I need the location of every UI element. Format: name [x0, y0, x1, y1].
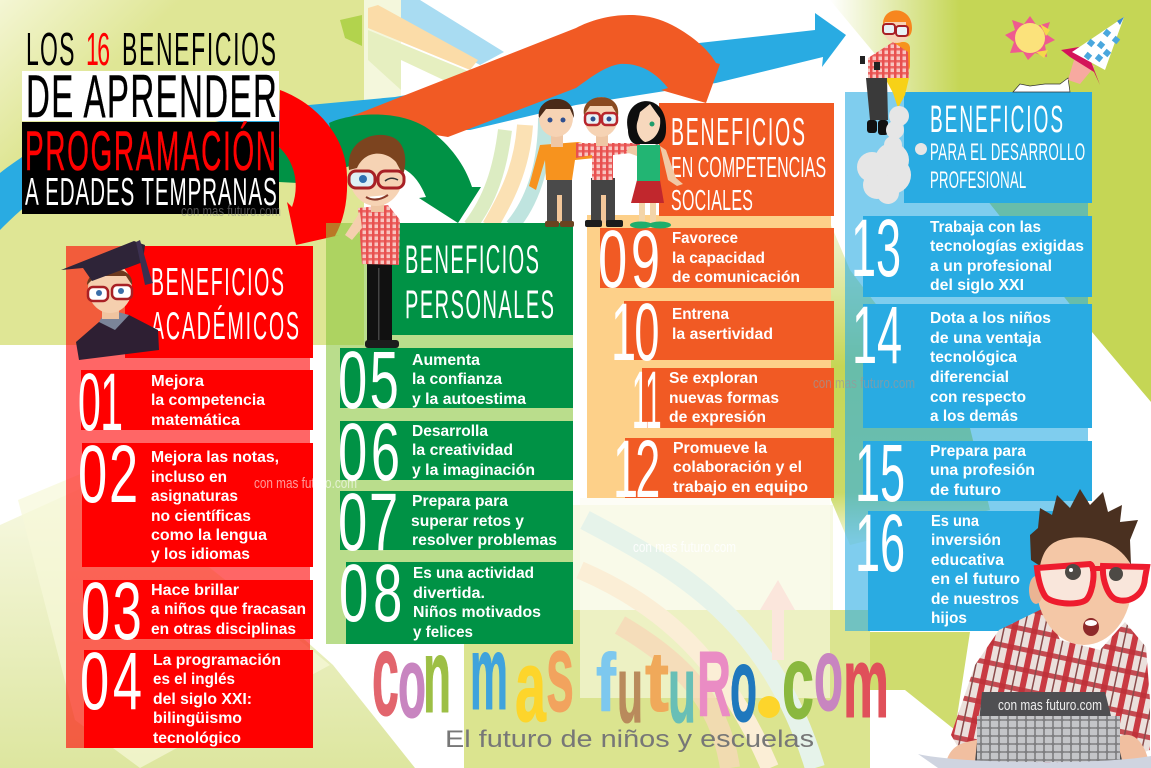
- item 03: 03: [81, 565, 142, 657]
- item 16: [855, 498, 1068, 631]
- icon: big boy with red glasses and keyboard: [918, 489, 1151, 768]
- item 13: del siglo XXI: [930, 277, 1024, 294]
- item 06: 06: [338, 406, 400, 498]
- background: top pastel ribbons: [340, 0, 545, 226]
- item 14: de una ventaja: [930, 330, 1041, 347]
- item 07: 07: [338, 476, 398, 568]
- logo: con mas futuro.com: [372, 609, 889, 744]
- item 03: en otras disciplinas: [151, 621, 296, 638]
- item 16: en el futuro: [931, 571, 1020, 588]
- item 04: es el inglés: [153, 671, 235, 688]
- item 10: Entrena: [672, 306, 729, 323]
- panel: académicos: [66, 246, 313, 748]
- item 05: y la autoestima: [412, 391, 526, 408]
- logo: con mas futuro.com: t: [645, 635, 669, 729]
- tagline: El futuro de niños y escuelas: [445, 726, 814, 753]
- heading: beneficios para el desarrollo profesional: [904, 92, 1092, 203]
- logo: con mas futuro.com: n: [423, 618, 451, 735]
- item 10: 10: [611, 287, 659, 379]
- heading: beneficios personales: BENEFICIOS: [405, 236, 539, 282]
- item 11: nuevas formas: [669, 390, 779, 407]
- watermarks: [254, 375, 915, 556]
- item 16: 16: [855, 498, 905, 590]
- item 04: La programación: [153, 652, 281, 669]
- background: lower-left pale area: [0, 470, 415, 768]
- item 15: 15: [855, 428, 905, 520]
- background: green strip behind blue panel: [831, 225, 990, 545]
- icon: three children: [529, 97, 683, 228]
- item 07: [338, 476, 573, 568]
- logo: con mas futuro.com: a: [515, 629, 547, 743]
- title: PROGRAMACIÓN: [25, 121, 276, 183]
- item 11: de expresión: [669, 409, 766, 426]
- item 06: la creatividad: [412, 442, 513, 459]
- item 02: y los idiomas: [151, 546, 250, 563]
- item 07: Prepara para: [412, 493, 508, 510]
- item 10: la asertividad: [672, 326, 773, 343]
- item 10: [611, 287, 834, 379]
- item 04: bilingüismo: [153, 710, 242, 727]
- title: A EDADES TEMPRANAS: [25, 170, 277, 214]
- item 15: [855, 428, 1092, 520]
- item 05: la confianza: [412, 371, 502, 388]
- heading: beneficios académicos: BENEFICIOS: [151, 260, 284, 304]
- background: lime triangle under blue panel: [848, 632, 970, 730]
- logo: con mas futuro.com: s: [546, 611, 574, 735]
- item 04: 04: [80, 635, 142, 727]
- item 12: 12: [613, 424, 660, 516]
- watermark: con mas futuro.com: [181, 203, 281, 220]
- item 09: 09: [598, 213, 660, 305]
- logo: con mas futuro.com: R: [697, 632, 731, 736]
- heading: beneficios académicos: [125, 246, 313, 358]
- title: 16: [86, 23, 110, 75]
- item 03: Hace brillar: [151, 582, 239, 599]
- heading: beneficios en competencias sociales: BENEFICIOS: [671, 110, 805, 154]
- item 13: 13: [851, 203, 901, 295]
- logo: con mas futuro.com: f: [596, 638, 617, 729]
- heading: beneficios personales: [388, 223, 573, 335]
- logo: con mas futuro.com: o: [398, 627, 426, 739]
- background: pale green top-left block: [0, 0, 364, 345]
- item 09: Favorece: [672, 230, 738, 247]
- background: lime green top-right area: [830, 0, 1151, 402]
- heading: beneficios en competencias sociales: [659, 103, 834, 216]
- item 05: [338, 334, 573, 426]
- background: lower-centre pastel area: [464, 498, 870, 768]
- title: BENEFICIOS: [122, 23, 276, 75]
- item 08: Es una actividad: [413, 565, 534, 582]
- watermarks: con mas futuro.com: [813, 375, 915, 392]
- icon: graduate character: [61, 240, 159, 360]
- item 02: [78, 428, 313, 567]
- item 09: la capacidad: [672, 250, 765, 267]
- item 02: Mejora las notas,: [151, 449, 279, 466]
- item 13: [851, 203, 1092, 297]
- item 02: asignaturas: [151, 488, 238, 505]
- arrow: green: [279, 114, 481, 223]
- icon: rocket: [1013, 17, 1124, 92]
- item 08: y felices: [413, 624, 473, 641]
- heading: beneficios personales: PERSONALES: [405, 281, 554, 327]
- logo: con mas futuro.com: m: [843, 627, 889, 739]
- heading: beneficios académicos: ACADÉMICOS: [151, 304, 299, 348]
- item 02: no científicas: [151, 508, 251, 525]
- watermarks: con mas futuro.com: [633, 539, 736, 556]
- item 14: 14: [852, 290, 902, 382]
- item 12: Promueve la: [673, 440, 767, 457]
- item 08: divertida.: [413, 585, 485, 602]
- item 11: 11: [632, 355, 662, 447]
- logo: con mas futuro.com: u: [668, 637, 696, 743]
- item 14: Dota a los niños: [930, 310, 1051, 327]
- item 03: a niños que fracasan: [151, 601, 306, 618]
- item 14: a los demás: [930, 408, 1018, 425]
- child: boy in orange: [529, 99, 595, 227]
- item 13: a un profesional: [930, 258, 1052, 275]
- item 12: trabajo en equipo: [673, 479, 808, 496]
- title: LOS: [26, 23, 74, 75]
- logo: con mas futuro.com: o: [814, 616, 843, 733]
- item 08: Niños motivados: [413, 604, 541, 621]
- icon: smoke cloud: [857, 106, 927, 204]
- arrow: blue: [0, 13, 846, 230]
- item 16: educativa: [931, 552, 1004, 569]
- child: boy with plaid shirt: [576, 97, 640, 227]
- item 05: Aumenta: [412, 352, 480, 369]
- child: girl: [626, 101, 683, 228]
- item 07: superar retos y: [411, 513, 524, 530]
- panel: desarrollo profesional: [845, 92, 1092, 631]
- item 15: Prepara para: [930, 443, 1026, 460]
- item 06: y la imaginación: [412, 462, 535, 479]
- item 02: como la lengua: [151, 527, 267, 544]
- logo: con mas futuro.com: c: [372, 609, 399, 741]
- item 13: tecnologías exigidas: [930, 238, 1084, 255]
- item 01: la competencia: [151, 392, 265, 409]
- title: [22, 23, 279, 214]
- icon: big boy with red glasses and keyboard: con mas futuro.com: [998, 697, 1102, 714]
- heading: beneficios en competencias sociales: SOCIALES: [671, 184, 753, 216]
- icon: sun: [1005, 16, 1055, 60]
- title: DE APRENDER: [26, 64, 277, 131]
- arrow: orange: [342, 15, 720, 137]
- item 14: con respecto: [930, 389, 1026, 406]
- item 01: [78, 355, 313, 448]
- item 16: de nuestros: [931, 591, 1019, 608]
- item 04: del siglo XXI:: [153, 691, 252, 708]
- item 06: Desarrolla: [412, 423, 488, 440]
- heading: beneficios en competencias sociales: EN COMPETENCIAS: [671, 151, 826, 183]
- panel: competencias sociales: [587, 103, 834, 516]
- item 11: Se exploran: [669, 370, 758, 387]
- item 09: [598, 213, 834, 305]
- item 16: inversión: [931, 532, 1001, 549]
- item 11: [632, 355, 834, 447]
- logo: con mas futuro.com: u: [617, 637, 643, 743]
- heading: beneficios para el desarrollo profesional: PROFESIONAL: [930, 167, 1026, 194]
- arrow: red: [279, 90, 347, 245]
- panel: personales: [326, 223, 573, 644]
- item 14: [852, 290, 1092, 428]
- item 08: [339, 547, 573, 644]
- item 12: colaboración y el: [673, 459, 802, 476]
- heading: beneficios para el desarrollo profesional: PARA EL DESARROLLO: [930, 139, 1085, 166]
- item 01: 01: [78, 355, 123, 448]
- item 13: Trabaja con las: [930, 219, 1041, 236]
- item 06: [338, 406, 573, 498]
- item 05: 05: [338, 334, 399, 426]
- item 02: incluso en: [151, 469, 227, 486]
- logo: con mas futuro.com: o: [730, 627, 757, 744]
- item 16: Es una: [931, 513, 979, 530]
- item 01: matemática: [151, 412, 240, 429]
- item 14: tecnológica: [930, 349, 1017, 366]
- item 03: [81, 565, 313, 657]
- item 08: 08: [339, 547, 402, 639]
- item 12: [613, 424, 834, 516]
- heading: beneficios para el desarrollo profesional: BENEFICIOS: [930, 99, 1063, 141]
- item 02: 02: [78, 428, 138, 520]
- item 07: resolver problemas: [412, 532, 557, 549]
- item 15: una profesión: [930, 462, 1035, 479]
- item 04: [80, 635, 313, 748]
- watermarks: con mas futuro.com: [254, 475, 357, 492]
- item 01: Mejora: [151, 373, 204, 390]
- icon: jetpack boy: [860, 10, 912, 135]
- item 09: de comunicación: [672, 269, 800, 286]
- item 16: hijos: [931, 610, 967, 627]
- icon: centre boy: [345, 135, 405, 348]
- logo: con mas futuro.com: m: [470, 615, 508, 732]
- item 15: de futuro: [930, 482, 1001, 499]
- logo: con mas futuro.com: c: [782, 624, 814, 741]
- item 04: tecnológico: [153, 730, 241, 747]
- item 14: diferencial: [930, 369, 1009, 386]
